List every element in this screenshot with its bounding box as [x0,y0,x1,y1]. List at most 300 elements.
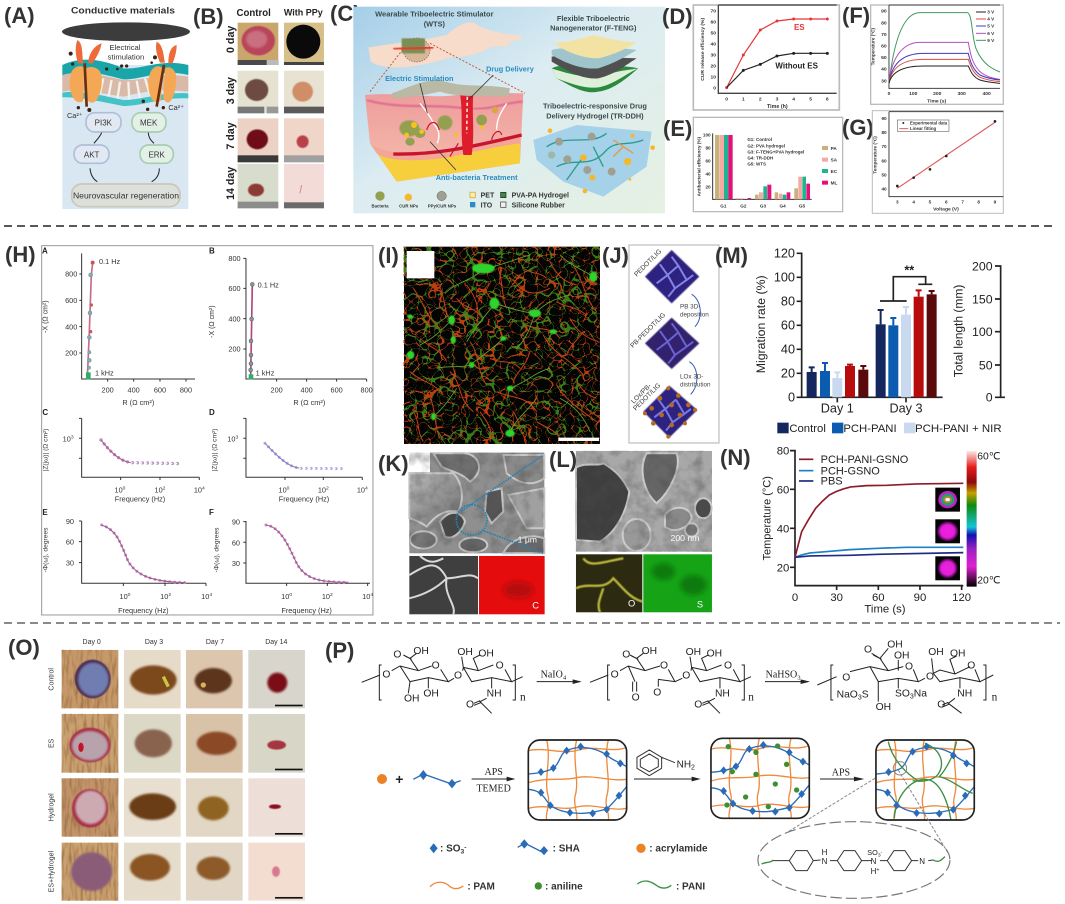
reaction arrow APS TEMED [472,767,515,794]
SEM base [576,451,712,552]
x title: Time (s) [864,603,906,615]
chart C impedance magnitude: 0 [123,485,126,491]
chart C impedance magnitude: 4 [202,485,205,491]
pathway arrows [90,133,159,182]
fit line [897,122,995,188]
chart B Nyquist: 600 [228,284,241,293]
F-TENG title: Flexible Triboelectric [557,14,630,23]
group labels: G2 [740,204,747,209]
molecule hyaluronic acid: O [393,649,401,660]
step text LOx: LOx 3D- [680,373,704,380]
x ticks: 400 [982,91,991,97]
chart F phase: 0 [289,592,292,598]
chart E phase: 10 [160,592,168,601]
x ticks: 0 [725,97,728,103]
row label 14 day: 14 day [225,167,237,200]
x tick labels: 90 [914,592,926,604]
panel J: PEDOT LIG schematic [602,243,719,443]
reaction arrow NaHSO3 [765,669,810,684]
group labels: G4 [780,204,786,209]
chart F phase: 30 [232,559,240,568]
reaction arrow NaHSO3: 3 [797,674,801,681]
schematic background [353,7,665,213]
chart C impedance magnitude: 2 [163,485,166,491]
ERK node [140,145,173,163]
chart F [870,5,1003,105]
legend M: PCH-PANI + NIR [915,423,1002,435]
F-TENG layers [552,35,638,92]
label anti-bacteria treatment: Anti-bacteria Treatment [436,173,518,182]
legend P: : acrylamide [649,843,708,854]
ES label: ES [794,23,805,32]
molecule hyaluronic acid: O [466,699,474,710]
legend N: PCH-PANI-GSNO [821,454,909,466]
bacteria clusters [399,107,498,146]
micrograph [404,247,600,444]
molecule sulfonated HA: OH [894,651,909,662]
molecule sulfonated HA: O [842,673,850,684]
chart B Nyquist: 1 kHz [256,368,275,377]
title WTS: Wearable Triboelectric Stimulator [375,10,494,19]
group labels: G1 [720,204,727,209]
y tick labels: 60 [781,319,795,333]
y ticks: 60 [881,158,887,163]
bacteria legend: EC [831,169,838,174]
chart A Nyquist: R (Ω cm²) [122,398,154,407]
white inset square [407,251,434,278]
chart E phase: 90 [66,517,74,526]
chart E phase: 0 [128,592,131,598]
molecule sulfonated HA: SO [895,689,910,700]
bars day 1 [807,366,868,397]
device layers on skin [392,80,510,98]
reaction arrow NaHSO3: NaHSO [766,669,797,680]
panel N: temperature chart with thermal insets [720,445,1000,615]
legend M [777,423,1002,435]
chart B Nyquist: 200 [271,385,283,394]
y ticks: 20 [705,184,711,189]
chart F phase: 10 [281,592,289,601]
chart F phase: 60 [232,538,240,547]
legend M: Control [789,423,826,435]
cell background [62,65,188,209]
step text PB: PB 3D- [680,303,700,310]
molecule hyaluronic acid: OH [457,647,473,658]
molecule oxidized HA: O [611,669,619,680]
photo 7 day PPy [284,118,324,162]
group key: G4: TR-DDH [747,156,773,161]
x ticks: 300 [957,91,966,97]
PANI molecular structure: N [871,857,877,866]
row headers: ES [48,738,55,748]
molecule oxidized HA: O [632,693,640,704]
photo 3 day control [238,71,278,113]
Ca label right: Ca²⁺ [168,103,184,112]
panel O: animal wound photo grid [8,635,305,901]
y ticks: 50 [881,172,887,177]
x ticks [888,91,991,97]
y tick labels: 40 [777,523,789,535]
chart B Nyquist: B [209,247,215,256]
MEK node [132,113,166,132]
molecule hyaluronic acid: n [520,692,526,704]
label P: (P) [325,638,354,663]
y tick labels: 120 [774,247,795,261]
molecule sulfonated HA: NH [957,688,972,699]
molecule oxidized HA: NH [715,688,730,699]
x ticks [725,97,829,103]
chart F phase: 10 [362,592,370,601]
molecule hyaluronic acid: O [454,671,462,682]
bars G2 [736,198,751,199]
y ticks: 70 [710,9,716,15]
bars G3 [755,185,771,199]
chart F phase: 10 [322,592,330,601]
AKT node: AKT [84,150,100,159]
frame [629,245,719,443]
plus sign: + [395,771,403,787]
label O: (O) [8,635,40,660]
x ticks: 4 [792,97,795,103]
molecule sulfonated HA: OH [928,647,944,658]
PI3K node [86,113,121,132]
bars G4 [775,192,790,199]
x ticks: 1 [742,97,745,103]
reaction arrow APS: APS [832,768,850,779]
label M: (M) [715,243,748,268]
chart E phase: -Φ(ω), degrees [43,527,50,572]
zoom guide lines [370,43,525,93]
chart N [762,446,1000,615]
y title: Migration rate (%) [754,275,768,373]
molecule sulfonated HA: O [864,645,872,656]
oxygen map: O [628,599,635,609]
chart E phase: 30 [66,559,74,568]
label N: (N) [720,445,751,470]
group labels: G5 [799,204,806,209]
x ticks: 200 [933,91,942,97]
red neurites [410,262,598,442]
x tick labels [792,592,971,604]
legend P: : aniline [545,882,583,893]
molecule sulfonated HA: OH [950,649,965,660]
chart F phase: 4 [370,592,373,598]
molecule hyaluronic acid: OH [478,649,494,660]
legend C: ITO [481,202,493,209]
legend P: : SHA [553,843,580,854]
chart F phase: F [209,508,214,517]
ion channels [70,63,176,107]
y tick labels: 20 [777,562,789,574]
label PB-PEDOT/LIG: PB-PEDOT/LIG [629,312,667,350]
photos B [225,7,324,208]
legend F: 6 V [987,31,995,36]
chart B Nyquist [209,247,373,407]
group key [747,137,804,167]
temperature curves [889,13,1000,83]
molecule sulfonated HA: O [905,661,913,672]
reaction arrow NaIO4: NaIO [541,669,563,680]
molecule oxidized HA: O [694,699,702,710]
legend P: : PAM [467,882,495,893]
heading conductive materials: Conductive materials [71,5,175,15]
chart D impedance magnitude: Frequency (Hz) [279,494,329,503]
chart E phase [42,508,212,615]
y ticks: 90 [881,116,887,121]
label K: (K) [378,451,409,476]
chart D impedance magnitude: 10 [279,485,287,494]
reaction arrow aniline: NH [677,759,691,770]
y title: Temperature (°C) [870,27,875,65]
y ticks [881,116,887,192]
molecule sulfonated HA: OH [876,702,891,713]
y ticks: 0 [713,85,716,91]
chart D impedance magnitude: 10 [318,485,326,494]
column headers: Day 0 [83,639,101,646]
neurovascular regeneration node [72,184,180,207]
bars G5 [794,177,810,199]
x ticks: 6 [945,199,948,204]
photo 0 day control [238,23,278,65]
molecule hyaluronic acid: O [382,669,390,680]
molecule hyaluronic acid: O [432,661,440,672]
label H: (H) [5,242,36,267]
y ticks [881,9,887,84]
grid O [48,639,305,901]
chart F phase [209,508,373,615]
colour scale bottom label: 20℃ [977,576,1000,587]
x ticks: 100 [909,91,918,97]
molecule oxidized HA: n [748,692,754,704]
chart A Nyquist: 600 [154,385,166,394]
chart frame [693,5,839,110]
reaction arrow NaIO4: 4 [563,674,567,681]
axes [790,451,963,590]
panel L: SEM and mapping [549,447,712,612]
bacteria legend [822,146,838,186]
chart B Nyquist: 200 [228,345,241,354]
y title: Temperature (°C) [762,476,774,560]
SEM base [409,453,544,553]
molecule sulfonated HA: OH [887,639,903,650]
y tick labels: 0 [788,391,795,405]
column headers: Day 14 [265,639,287,646]
x ticks: 0 [888,91,891,97]
black image background [404,247,600,444]
legend F [975,8,997,43]
chart A Nyquist: 800 [65,270,77,279]
bars G1 [715,135,733,199]
molecule hyaluronic acid: OH [404,694,419,705]
label B: (B) [193,4,224,29]
chart A Nyquist: 800 [180,385,192,394]
chart G [872,111,1003,213]
ES row photos [62,714,305,773]
group key: G2: PVA hydrogel [747,143,785,148]
molecule oxidized HA: O [682,671,690,682]
SHA chain icon [413,770,461,788]
column headers: Day 3 [145,639,163,646]
row headers: Control [48,668,55,691]
TR-DDH title line two: Delivery Hydrogel (TR-DDH) [546,111,644,120]
PANI molecular structure: N [822,857,828,866]
legend C: PET [481,193,495,200]
row headers: Hydrogel [48,793,55,821]
molecule sulfonated HA: 3 [910,694,914,701]
y ticks: 30 [710,53,716,59]
reaction arrow APS TEMED: APS [484,767,503,778]
column header with PPy: With PPy [284,7,323,17]
secondary axis title: Total length (mm) [952,285,966,377]
axes [889,5,1000,88]
y ticks: 60 [710,20,716,26]
hydrogel network box two with aniline [711,738,809,818]
x ticks: 6 [826,97,829,103]
group key: G1: Control [747,137,772,142]
photo 14 day PPy [284,164,324,208]
colour scale top label: 60℃ [977,451,1000,462]
legend F: 3 V [987,10,995,15]
chart E phase: 2 [168,592,171,598]
electrical flames [76,40,177,63]
legend G: Linear fitting [910,126,937,131]
schematic C [353,7,665,213]
step text deposition: deposition [680,311,709,318]
dashed divider top [4,225,1055,227]
chart E phase: E [42,508,48,517]
chart E phase: 4 [209,592,212,598]
chart D impedance magnitude: 2 [326,485,329,491]
label LOx/PB-: LOx/PB- [630,383,653,405]
ES plus hydrogel row photos [62,843,305,901]
label PEDOT/LIG second line: PEDOT/LIG [632,382,662,412]
legend M: PCH-PANI [843,423,897,435]
axes [713,133,812,199]
chart D impedance magnitude: |Z(jω)| (Ω cm²) [212,429,219,471]
chart A Nyquist [42,247,195,407]
chart C impedance magnitude: 10 [115,485,123,494]
y title: Antibacterial efficiency (%) [697,136,702,196]
label G: (G) [842,115,874,140]
label I: (I) [378,243,399,268]
day 3 label: Day 3 [889,401,923,415]
secondary axis: 200 [972,259,993,273]
x ticks: 8 [977,199,980,204]
panel E: antibacterial efficiency chart [663,116,843,212]
panel C: wearable triboelectric stimulator schematic [330,1,665,213]
panel K: SEM and mapping [378,451,545,614]
green filament texture [404,247,600,444]
green neurites [420,255,593,432]
molecule oxidized HA: OH [686,647,701,658]
x ticks: 5 [929,199,932,204]
y ticks: 40 [881,67,887,73]
PANI molecular structure: SO [867,848,878,857]
day labels: Day 1 [821,401,854,415]
row label 0 day: 0 day [225,26,237,53]
chart M [754,247,1005,435]
reaction arrow aniline: 2 [691,764,695,771]
x tick labels: 30 [830,592,843,604]
x ticks: 7 [961,199,964,204]
MEK node: MEK [140,118,158,127]
step arrows [689,294,700,394]
panel H: electrochemical impedance charts [5,242,373,615]
SEM L [576,451,712,612]
group labels [720,204,806,209]
column headers: Day 7 [206,639,224,646]
y title: Temperature (°C) [873,136,878,174]
molecule oxidized HA: O [653,688,661,699]
y ticks: 40 [705,171,711,176]
chart B Nyquist: 400 [301,385,313,394]
control row photos [62,650,305,708]
molecule hyaluronic acid [362,646,526,713]
panel D: CUR release chart [662,4,839,110]
molecule hyaluronic acid: O [496,661,504,672]
x ticks: 3 [776,97,779,103]
panel B: wound photo grid [193,4,324,208]
chart C impedance magnitude [42,408,205,503]
membrane lipid tails [62,73,188,106]
chart B Nyquist: -X (Ω cm²) [209,305,216,338]
legend N: PBS [821,476,843,488]
chart B Nyquist: 600 [331,385,343,394]
x axis title: Time (h) [767,104,788,110]
row label 7 day: 7 day [225,122,237,150]
secondary axis: 50 [979,358,993,372]
y tick labels: 80 [777,446,789,458]
molecule oxidized HA: O [622,649,630,660]
PANI molecular structure: 3 [878,853,881,859]
chart B Nyquist: R (Ω cm²) [293,398,325,407]
x title: Time (s) [927,99,946,105]
chart C impedance magnitude: Frequency (Hz) [115,494,165,503]
photo 7 day control [238,118,278,162]
chart E phase: Frequency (Hz) [118,606,169,615]
legend C: Bacteria [371,203,389,208]
chart F phase: 90 [232,518,240,527]
diamond LOx/PB-PEDOT/LIG [643,386,697,439]
molecule oxidized HA: OH [642,646,657,657]
PANI molecular structure: - [881,849,883,855]
ES curve [725,17,829,89]
ERK node: ERK [148,150,166,159]
chart A Nyquist: 600 [65,296,77,305]
photo 0 day PPy [284,23,324,65]
y tick labels: 80 [781,295,795,309]
electrical stimulation label: Electrical [109,43,141,52]
error bars [809,290,935,378]
sulfur map: S [697,600,703,610]
photo 3 day PPy [284,71,324,113]
TR-DDH title: Triboelectric-responsive Drug [543,102,647,111]
label PEDOT/LIG: PEDOT/LIG [633,248,663,278]
F-TENG title line two: Nanogenerator (F-TENG) [550,24,637,33]
y tick labels: 100 [774,271,795,285]
magnification guide [456,455,543,553]
chart E phase: 10 [120,592,128,601]
row headers: ES+Hydrogel [48,851,55,892]
chart D impedance magnitude: D [209,408,215,417]
sulfur map [643,554,712,612]
group key: G3: F-TENG+PVA hydrogel [747,149,804,154]
molecule sulfonated HA: Na [914,689,927,700]
PANI molecular structure [762,848,945,876]
y tick labels [774,247,795,405]
PCH-GSNO curve [795,547,963,557]
bacteria legend: ML [831,181,838,186]
